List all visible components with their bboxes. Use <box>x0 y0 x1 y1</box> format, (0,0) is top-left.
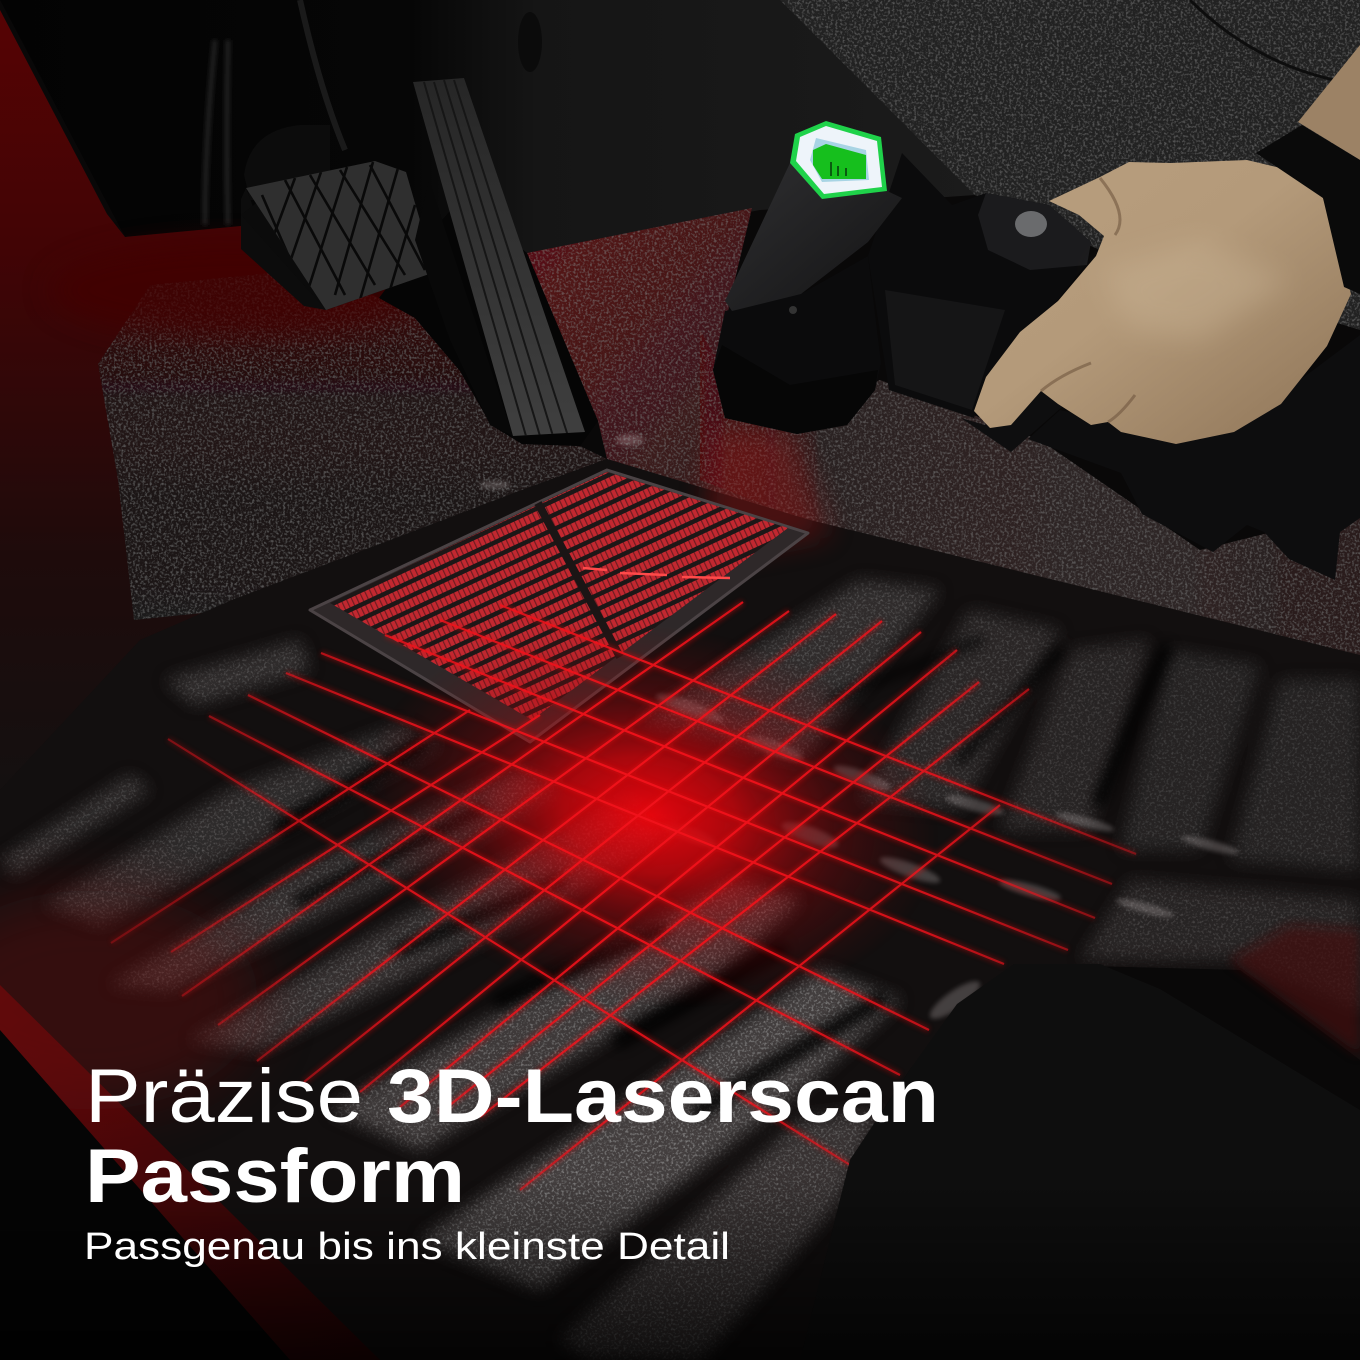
heel pad red stripes <box>330 472 788 720</box>
palm and fingers <box>974 160 1351 444</box>
mat cross shadows <box>283 640 1165 1110</box>
laser grid glow <box>111 602 1136 1190</box>
lit mat ridges <box>0 580 1360 1360</box>
dark interior wall <box>0 0 975 290</box>
central laser glow <box>336 586 964 1044</box>
laser grid <box>111 602 1136 1190</box>
right mat wall <box>700 330 1360 658</box>
red laser haze under scanner <box>700 430 830 560</box>
right lower red mat edge <box>1230 925 1360 1055</box>
scanner head <box>713 256 881 434</box>
bottom left red mat edge <box>0 985 380 1360</box>
bottom left floor <box>0 1030 290 1360</box>
scanner lower body <box>1028 335 1360 580</box>
dark pedal well <box>379 200 598 446</box>
3D scanner <box>713 121 1360 580</box>
forearm <box>1298 45 1360 160</box>
accelerator pedal <box>413 78 585 436</box>
red wash blending upper mat edge <box>50 242 430 338</box>
heel pad <box>310 470 808 742</box>
subtitle: Passgenau bis ins kleinste Detail <box>84 1226 730 1268</box>
brake pedal <box>241 161 440 310</box>
red rear carpet panel <box>527 208 815 522</box>
red side panel <box>0 10 522 790</box>
upper mat leather surface <box>98 270 607 620</box>
scanner grip <box>868 153 1091 418</box>
red tint on left mat <box>0 890 260 1110</box>
laser grid lines <box>111 602 1136 1190</box>
hand creases <box>1041 178 1135 422</box>
headline: 3D-Laserscan <box>387 1054 939 1139</box>
headline: Passform <box>85 1134 465 1219</box>
hand highlight <box>1100 240 1290 340</box>
upper right leather panel <box>780 0 1360 330</box>
scanner thumb guard <box>961 385 1070 452</box>
interior wall details <box>205 0 1360 225</box>
scanner status light <box>790 121 887 199</box>
floor mat base <box>0 459 1360 1360</box>
scanner button pod <box>978 193 1091 270</box>
heel pad bright dashes <box>583 568 730 578</box>
headline: Präzise <box>85 1054 363 1139</box>
watch strap <box>1256 125 1360 294</box>
hand <box>974 45 1360 444</box>
leather highlights <box>479 434 1240 1025</box>
front seat <box>800 964 1360 1360</box>
headline <box>85 1054 939 1219</box>
heel pad channels <box>538 503 620 657</box>
bottom shade <box>0 1180 1360 1360</box>
